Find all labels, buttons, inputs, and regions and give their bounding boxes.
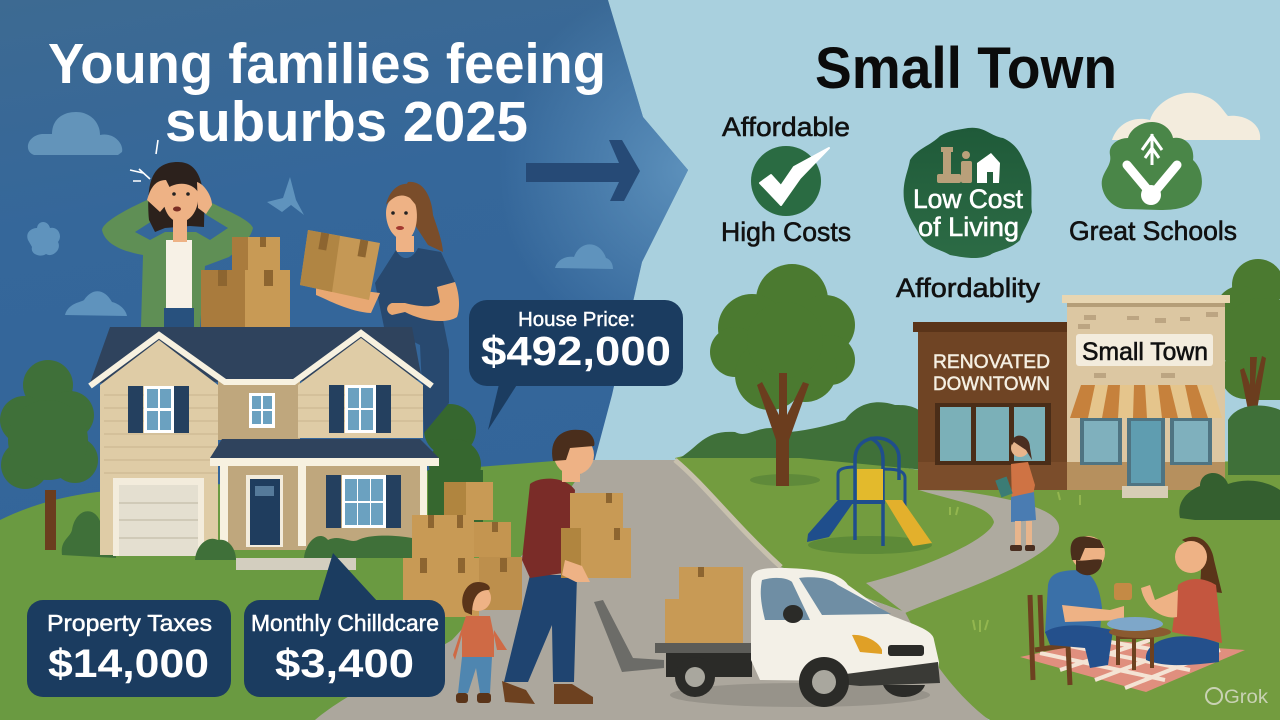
bush: right of shop bbox=[1179, 473, 1280, 520]
callout: monthly childcare: Monthly Chilldcare bbox=[251, 610, 439, 636]
bushes behind small town bbox=[680, 402, 925, 470]
callout: property taxes: Property Taxes bbox=[47, 610, 212, 636]
person: man carrying boxes bbox=[502, 430, 631, 704]
building: small town shop bbox=[1062, 295, 1230, 498]
building: renovated downtown: DOWNTOWN bbox=[933, 374, 1050, 395]
building: renovated downtown: RENOVATED bbox=[933, 352, 1050, 373]
tree: suburb left bbox=[0, 360, 98, 550]
house bbox=[90, 327, 439, 570]
person: stressed woman bbox=[102, 140, 253, 327]
callout: house price: House Price: bbox=[518, 309, 635, 331]
decorative clouds on blue panel bbox=[27, 112, 613, 316]
right-hand grass bbox=[675, 453, 1280, 720]
building: renovated downtown bbox=[913, 322, 1068, 490]
callout: house price bbox=[469, 300, 683, 430]
label: Great Schools: Great Schools bbox=[1069, 216, 1237, 246]
playground bbox=[807, 438, 932, 554]
tree: small town centre bbox=[710, 264, 855, 486]
grass tufts bbox=[950, 492, 1080, 632]
callout: property taxes bbox=[27, 600, 231, 697]
title: suburbs 2025 bbox=[165, 90, 528, 154]
moving boxes: on roof bbox=[201, 237, 290, 327]
label: Affordable: Affordable bbox=[722, 112, 850, 142]
road edge bbox=[675, 460, 781, 567]
person: woman by shop bbox=[995, 436, 1036, 551]
tree: behind house right bbox=[424, 404, 483, 530]
icon: great schools bbox=[1102, 122, 1202, 210]
background: suburb blue panel bbox=[0, 0, 688, 560]
badge: low cost of living: Low Cost bbox=[913, 184, 1023, 214]
person: child bbox=[453, 582, 507, 703]
arrow: suburb to small town bbox=[526, 140, 640, 201]
title: Young families feeing bbox=[48, 32, 606, 96]
shrubs by porch bbox=[195, 536, 412, 560]
moving boxes: pile beside house bbox=[403, 482, 522, 617]
road bbox=[315, 460, 989, 720]
label: High Costs: High Costs bbox=[721, 217, 851, 247]
heading: Small Town: Small Town bbox=[815, 36, 1117, 101]
watermark: Grok bbox=[1206, 687, 1269, 708]
callout: house price: $492,000 bbox=[481, 328, 671, 374]
building: small town shop: Small Town bbox=[1082, 338, 1208, 366]
garden path bbox=[866, 490, 1059, 613]
callout: monthly childcare bbox=[244, 553, 445, 697]
badge: low cost of living bbox=[904, 128, 1032, 258]
person: woman holding box bbox=[300, 182, 459, 433]
truck bbox=[594, 567, 940, 707]
callout: monthly childcare: $3,400 bbox=[275, 642, 414, 686]
icon: check mark circle bbox=[751, 146, 829, 216]
watermark: Grok: Grok bbox=[1224, 687, 1269, 708]
bush: beside garage bbox=[62, 511, 116, 558]
picnic scene bbox=[1020, 536, 1245, 692]
callout: property taxes: $14,000 bbox=[48, 642, 209, 686]
cloud: small town top right bbox=[1112, 93, 1260, 140]
label: Affordablity: Affordablity bbox=[896, 273, 1041, 303]
title bbox=[48, 32, 606, 154]
left-hand grass bbox=[0, 458, 592, 720]
badge: low cost of living: of Living bbox=[918, 212, 1019, 242]
tree: small town right bbox=[1216, 259, 1280, 475]
